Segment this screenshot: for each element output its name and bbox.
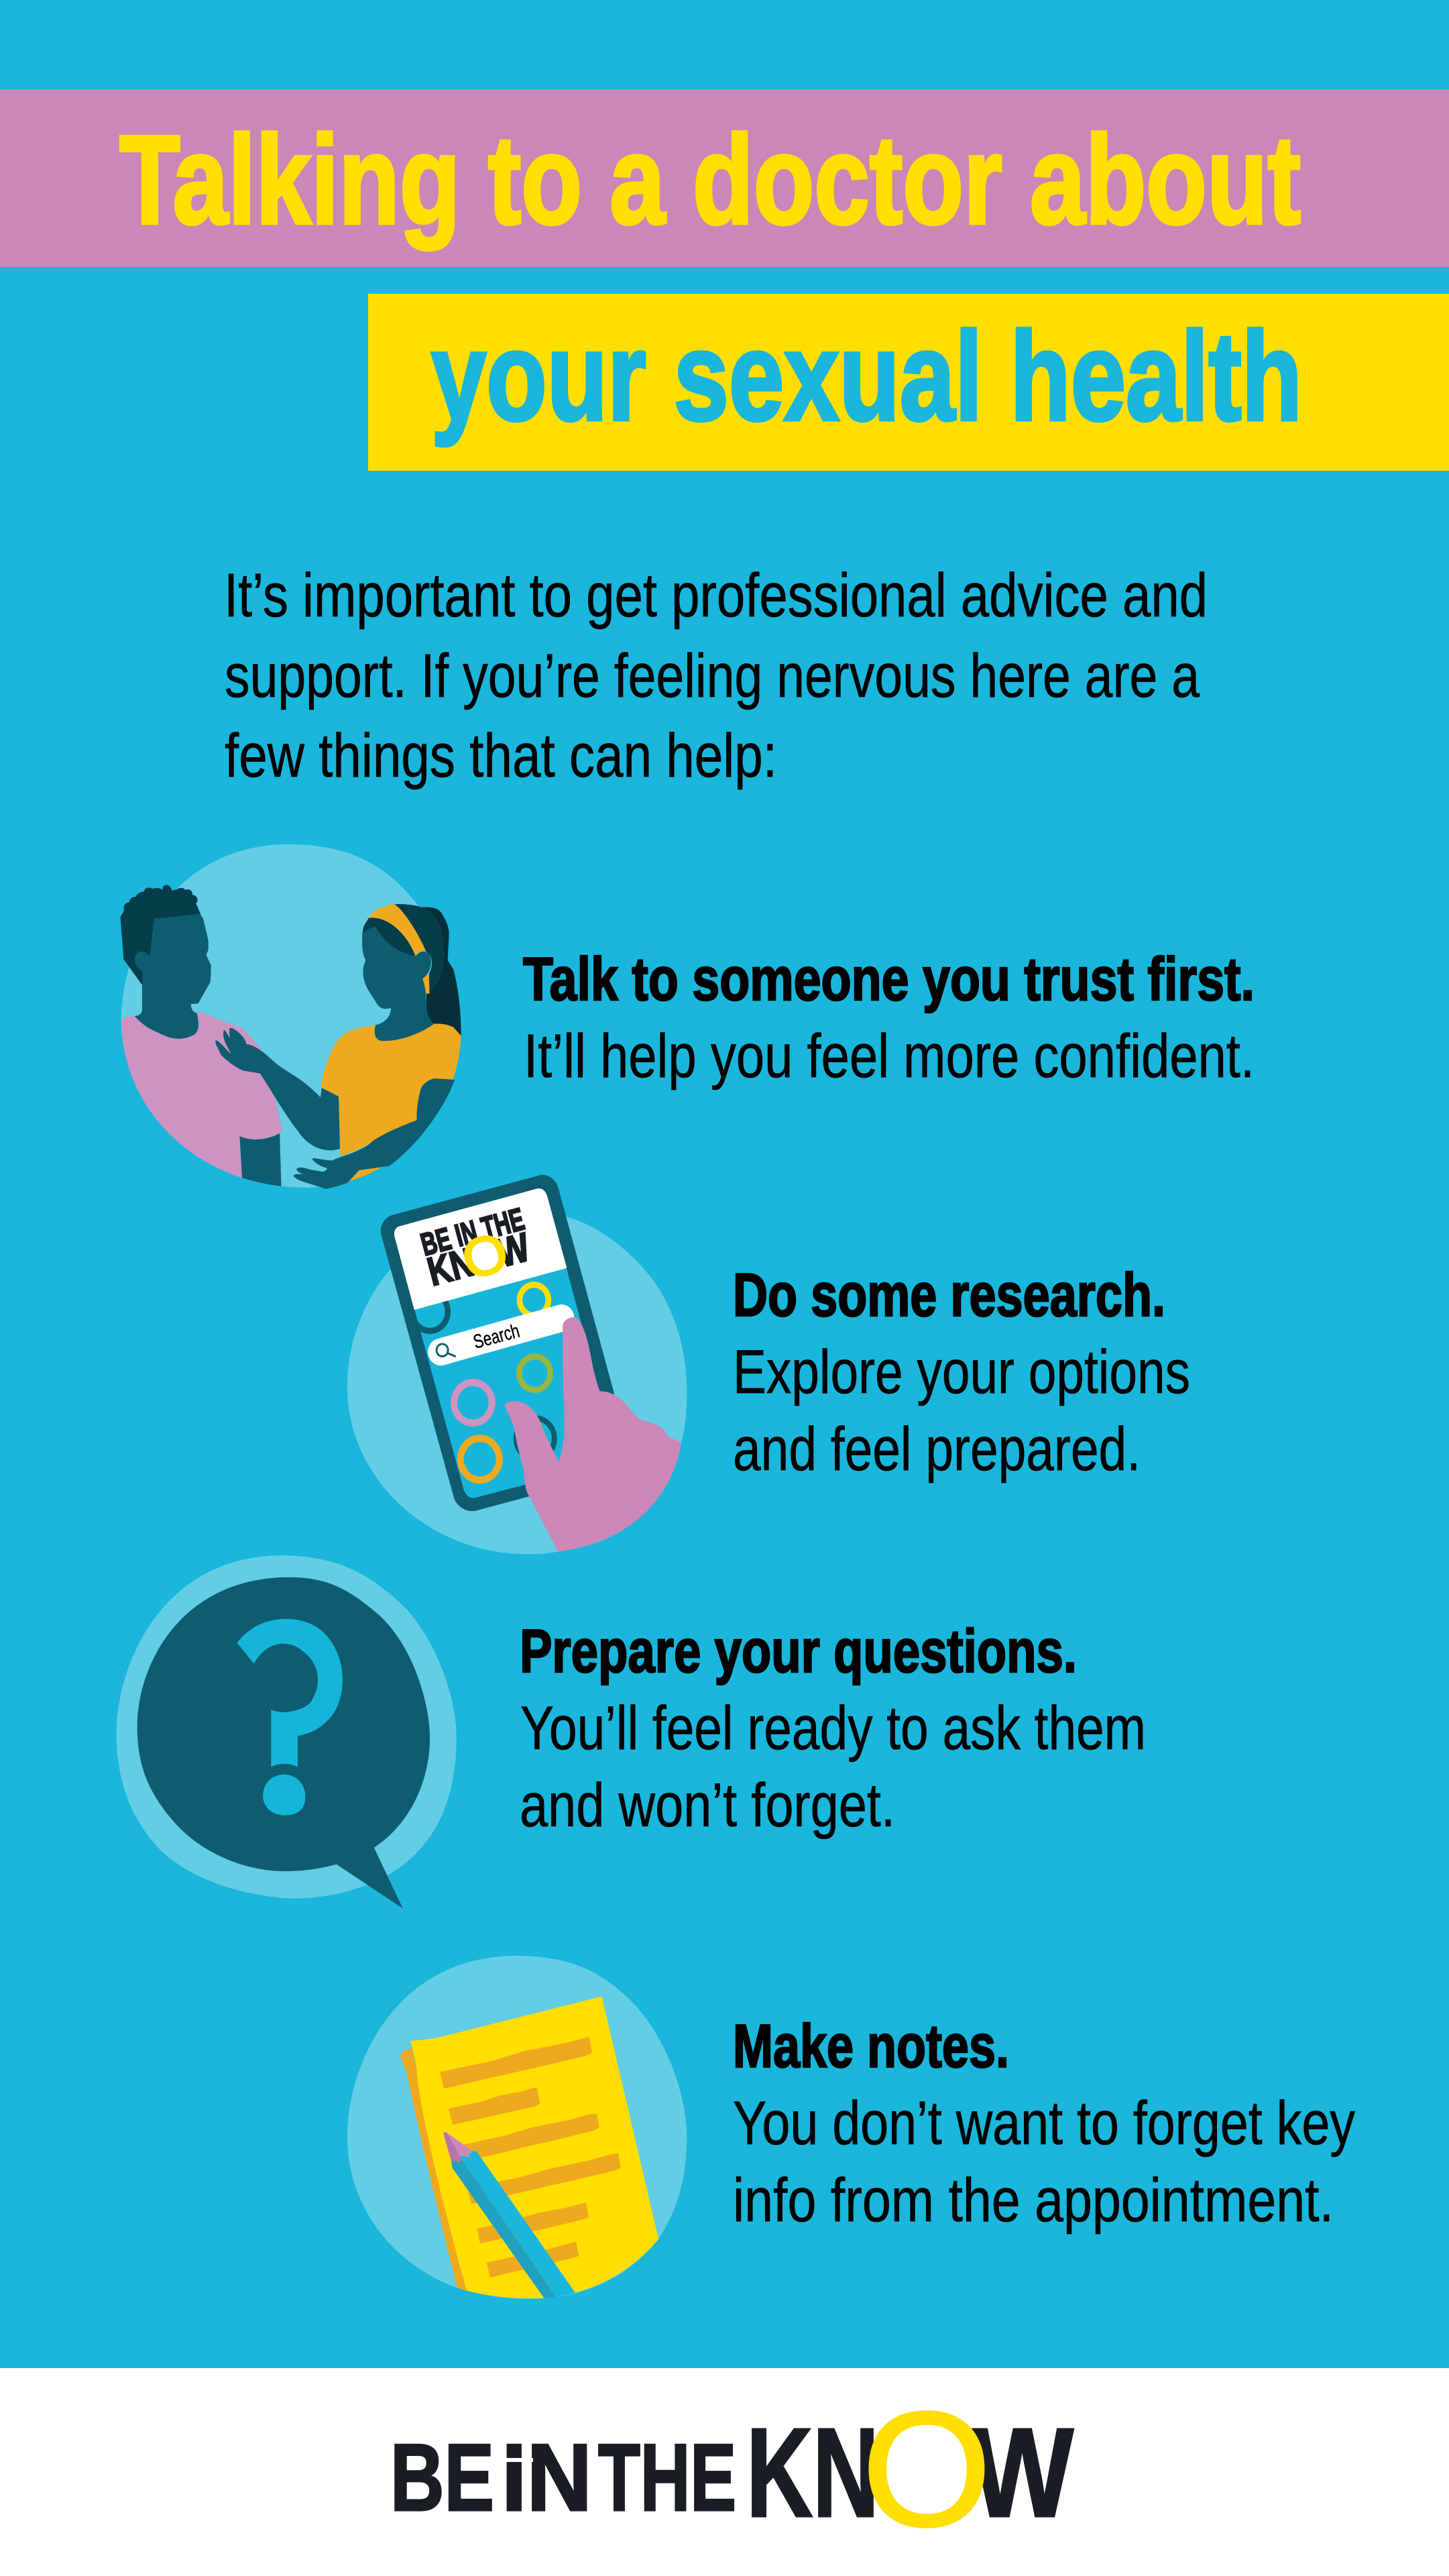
search label: Search [471, 1321, 522, 1353]
text: do some research [733, 1262, 1190, 1483]
text: prepare your questions: You’ll feel ready to ask them [520, 1694, 1146, 1762]
logo: be in the know: W [971, 2402, 1074, 2544]
text: do some research: Do some research. [733, 1262, 1165, 1329]
item 4: make notes [347, 1956, 1355, 2299]
text: talk to someone: It’ll help you feel more confident. [524, 1022, 1255, 1090]
intro text: It’s important to get professional advice and [224, 561, 1208, 630]
icon: phone with search and hand [347, 1175, 687, 1554]
phone logo: BE IN THE [417, 1200, 528, 1262]
icon: notepad and pencil [347, 1956, 687, 2299]
text: make notes: info from the appointment. [733, 2166, 1334, 2235]
phone logo [417, 1200, 534, 1294]
item 1: talk to someone [111, 844, 1255, 1192]
logo: be in the know: KN [746, 2402, 879, 2544]
text: prepare your questions: Prepare your questions. [520, 1618, 1077, 1685]
phone logo: O [456, 1221, 514, 1291]
item 2: do some research [347, 1175, 1190, 1554]
phone logo: KN [423, 1239, 479, 1294]
logo: be in the know: THE [598, 2424, 736, 2531]
logo: be in the know: IN [502, 2424, 592, 2531]
text: do some research: and feel prepared. [733, 1415, 1141, 1483]
intro text: few things that can help: [225, 722, 777, 790]
item 3: prepare your questions [117, 1555, 1146, 1909]
logo: be in the know [390, 2378, 1074, 2561]
logo: be in the know: BE [390, 2424, 494, 2531]
text: do some research: Explore your options [733, 1338, 1190, 1406]
logo: be in the know: O [862, 2378, 992, 2561]
intro text [224, 561, 1208, 790]
intro text: support. If you’re feeling nervous here are a [225, 642, 1200, 710]
text: prepare your questions: and won’t forget. [520, 1771, 895, 1840]
text: make notes [733, 2013, 1355, 2235]
footer band with logo [0, 2368, 1449, 2576]
icon: two people talking [111, 844, 463, 1192]
text: talk to someone: Talk to someone you trust first. [523, 946, 1255, 1013]
phone logo: W [492, 1224, 534, 1276]
text: make notes: Make notes. [733, 2013, 1009, 2080]
icon: speech bubble with question mark [117, 1555, 457, 1909]
text: talk to someone [523, 946, 1255, 1090]
text: prepare your questions [520, 1618, 1146, 1840]
